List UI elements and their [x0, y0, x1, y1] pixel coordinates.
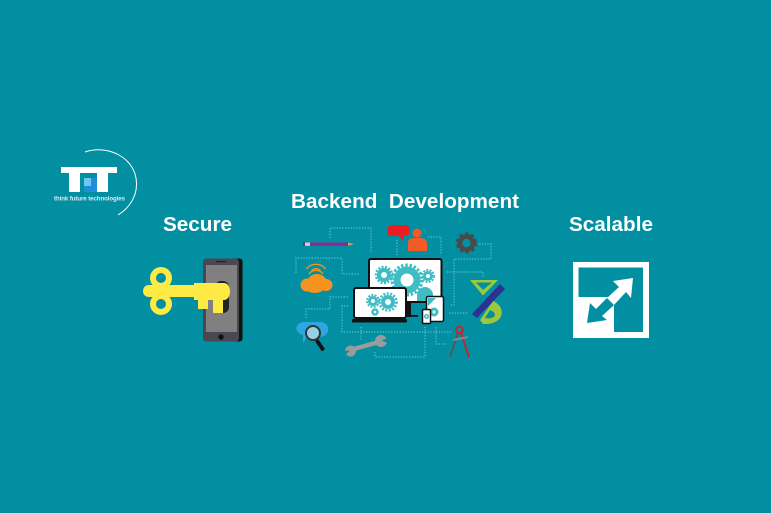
icon: red speech bubble — [387, 225, 410, 241]
dotted circuit connectors — [296, 228, 491, 357]
heading: Backend Development: Backend Development — [291, 190, 519, 213]
heading: Secure: Secure — [163, 213, 232, 236]
big monitor — [369, 259, 442, 317]
icon: person — [408, 228, 427, 251]
icon: drawing compass — [450, 323, 469, 357]
icon: magnifier on speech bubble — [296, 322, 328, 352]
icon: phone with key — [143, 258, 242, 342]
icon: scalable expand square — [573, 262, 649, 338]
pencil — [303, 242, 354, 246]
key — [143, 270, 230, 313]
tablet — [426, 296, 444, 322]
phone small — [422, 310, 430, 324]
icon: wrench — [343, 335, 390, 357]
illustration: backend development — [296, 225, 505, 357]
icon: gear — [457, 234, 476, 252]
logo: think future technologies — [54, 150, 137, 215]
heading: Scalable: Scalable — [569, 213, 653, 236]
icon: cloud with wifi — [300, 264, 332, 293]
logo: think future technologies: think future technologies — [54, 196, 126, 202]
laptop — [352, 288, 407, 322]
phone — [203, 258, 242, 342]
icon: rulers and protractor — [470, 280, 505, 324]
